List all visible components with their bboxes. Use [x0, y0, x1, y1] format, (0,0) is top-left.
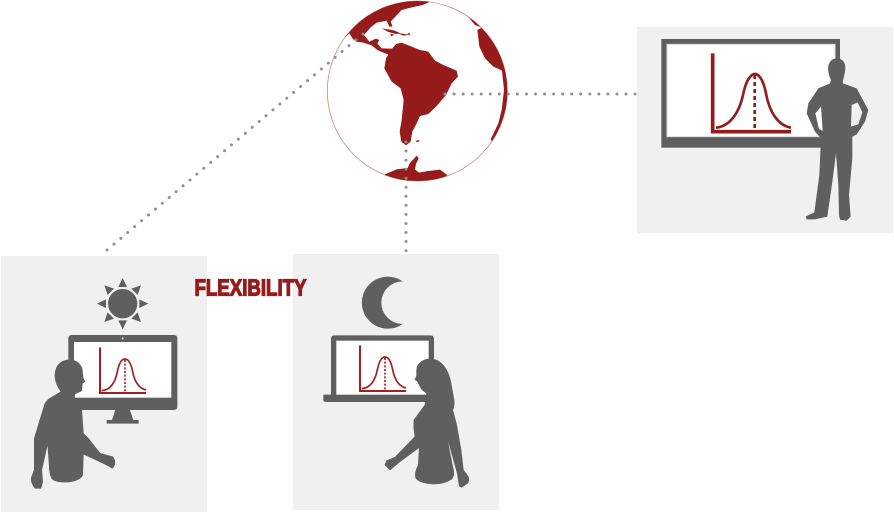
panel: nighttime laptop learner: [293, 254, 499, 510]
antarctica: [383, 156, 447, 183]
africa: [477, 28, 508, 142]
icon: sun: [97, 278, 148, 329]
icon: crescent moon: [362, 277, 403, 329]
chart: bell curve: [360, 345, 406, 391]
globe: [327, 0, 520, 183]
caribbean islands: [382, 28, 410, 36]
icon: projection screen: [661, 39, 840, 148]
connector: globe to classroom panel: [445, 92, 636, 96]
silhouette: standing man: [806, 58, 868, 221]
icon: laptop: [323, 335, 447, 402]
south america: [384, 43, 458, 145]
connector: globe to desktop panel: [107, 33, 364, 250]
chart: bell curve: [713, 53, 791, 132]
chart: bell curve: [100, 347, 146, 393]
north and central america: [344, 1, 429, 55]
classroom scene: [661, 39, 868, 221]
desktop scene: [31, 278, 177, 488]
silhouette: seated woman: [385, 359, 469, 487]
silhouette: seated man: [31, 360, 115, 488]
laptop scene: [323, 277, 469, 487]
panel: daytime desktop learner: [1, 256, 207, 512]
connector: globe to laptop panel: [404, 142, 408, 252]
heading: flexibility: FLEXIBILITY: [194, 274, 306, 300]
icon: desktop monitor: [68, 335, 177, 424]
panel: classroom presenter: [637, 27, 893, 233]
